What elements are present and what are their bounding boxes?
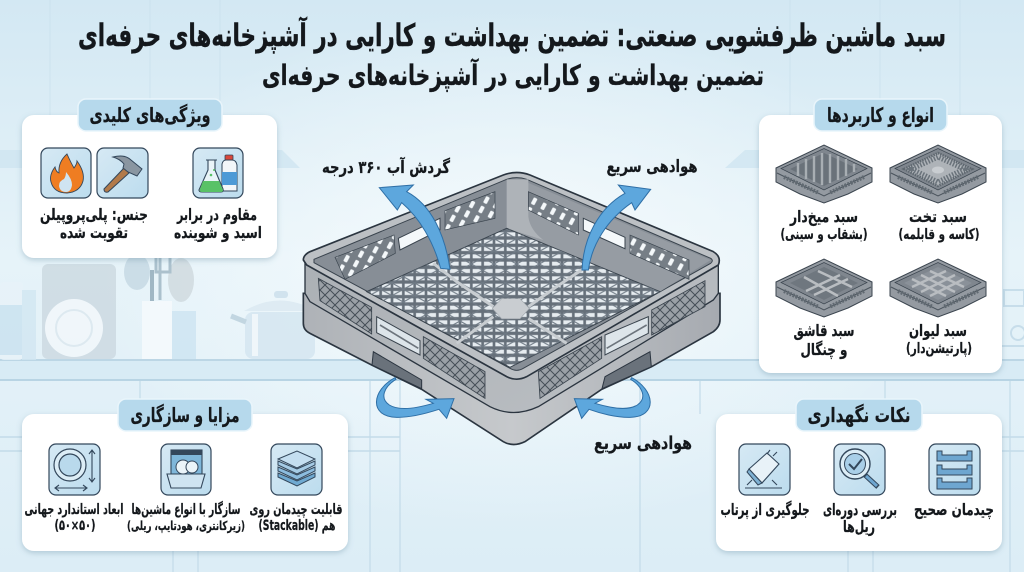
heading: maintenance: نکات نگهداری [808,403,910,427]
heading: key features [78,99,222,131]
label: fast ventilation bottom: هوادهی سریع [594,433,692,454]
heading: types and uses [814,99,947,131]
rack outer rim [303,172,719,379]
text: cutlery rack [794,321,854,360]
icon: pronged rack [776,145,872,203]
text: compatibility: (زیرکانتری، هودتایپ، ریلی) [127,518,245,533]
arrow: ventilation lower left [376,378,454,418]
text: compatibility [127,500,245,533]
text: compatibility: سازگار با انواع ماشین‌ها [132,500,240,518]
text: glass rack [906,321,972,357]
label: 360 degree water circulation: گردش آب ۳۶۰ درجه [322,156,450,178]
text: periodic check: بررسی دوره‌ای [823,500,897,519]
rack base [303,293,720,444]
panel: key features [22,99,277,258]
text: stackable: قابلیت چیدمان روی [250,502,342,518]
text: standard dimensions: ابعاد استاندارد جهانی [24,502,124,518]
heading: advantages: مزایا و سازگاری [130,403,240,427]
text: cutlery rack: سبد قاشق [794,321,854,340]
text: glass rack: سبد لیوان [909,321,967,340]
title line 2: تضمین بهداشت و کارایی در آشپزخانه‌های حرفه‌ای [262,58,764,92]
icon: falling rack [739,444,790,495]
back handle windows [398,218,440,250]
icon: flame [41,148,91,198]
icon: chemical flask and bottle [193,148,243,198]
icon: stacked layers [271,444,322,495]
text: flat rack: سبد تخت [909,207,967,226]
panel: maintenance tips [716,399,1002,551]
heading: advantages [118,399,252,431]
icon: glass rack [890,259,986,317]
heading: maintenance [796,399,922,431]
text: cutlery rack: و چنگال [800,340,848,360]
arrow: ventilation up right [582,185,651,270]
text: pronged rack: سبد میخ‌دار [789,207,858,226]
rack interior [314,178,712,370]
back lattice panels [335,235,395,279]
panel: types and uses [759,99,1002,373]
icon: hammer [97,148,148,198]
text: pronged rack [780,207,868,243]
base handle slots [372,352,422,389]
icon: cutlery rack [776,259,872,317]
text: acid resistance: مقاوم در برابر [176,205,257,224]
arrow: water circulation up left [379,185,450,269]
text: acid resistance: اسید و شوینده [174,223,262,242]
rack floor grid [367,228,660,367]
text: periodic check [823,500,897,536]
icon: plate dimensions [49,444,100,495]
text: standard dimensions: (۵۰×۵۰) [55,518,96,534]
text: periodic check: ریل‌ها [843,517,875,536]
text: flat rack [898,207,980,243]
floor ribs and centre hub [433,263,587,343]
heading: key features: ویژگی‌های کلیدی [90,103,210,127]
text: acid resistance [174,205,262,242]
text: material: جنس: پلی‌پروپیلن [40,205,148,225]
icon: flat rack [890,145,986,203]
text: correct stacking: چیدمان صحیح [914,500,994,520]
icon: stacked trays [929,444,980,495]
front lattice panels [318,278,372,334]
icon: magnifier check [834,444,885,495]
rack upper body [305,173,718,412]
front handle windows [377,317,420,355]
heading: types and uses: انواع و کاربردها [827,103,934,127]
text: pronged rack: (بشقاب و سینی) [780,227,868,243]
label: fast ventilation top: هوادهی سریع [606,157,698,177]
main illustration: dishwasher rack [303,172,720,444]
icon: dishwasher [161,444,211,495]
text: flat rack: (کاسه و قابلمه) [898,227,980,243]
title [78,16,946,92]
text: material: تقویت شده [60,223,128,242]
text: avoid throwing: جلوگیری از پرتاب [720,500,810,520]
text: standard dimensions [24,502,124,534]
text: material [40,205,148,242]
arrow: ventilation lower right [574,378,650,418]
panel: advantages and compatibility [22,399,348,551]
text: stackable [250,502,342,534]
text: stackable: هم (Stackable) [258,518,336,534]
text: glass rack: (پارتیشن‌دار) [906,341,972,357]
